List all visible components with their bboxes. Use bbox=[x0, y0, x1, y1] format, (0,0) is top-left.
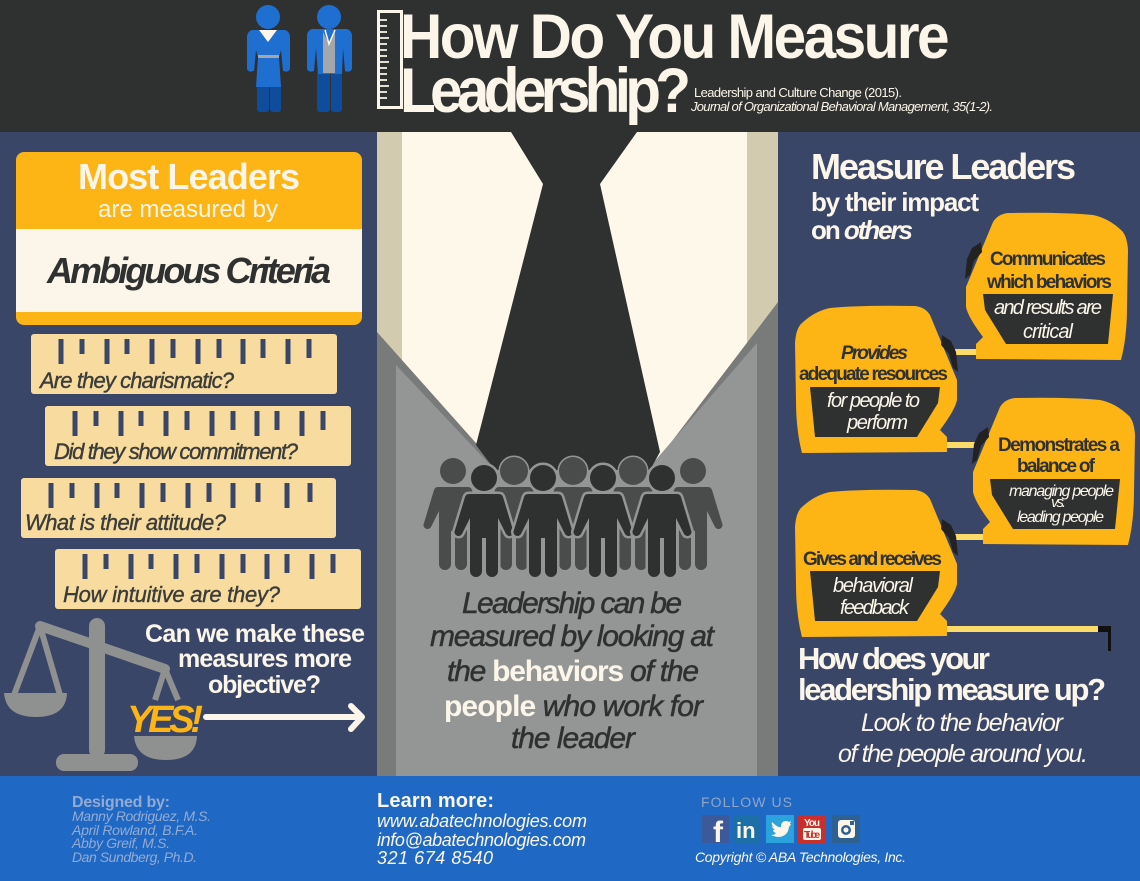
tape measure: demonstrates: vs. bbox=[1051, 494, 1066, 511]
footer bbox=[0, 776, 1140, 881]
icon: ruler outline bbox=[378, 12, 402, 108]
question: more objective: objective? bbox=[208, 671, 321, 699]
learn more: info@abatechnologies.com bbox=[377, 830, 586, 850]
arrow bbox=[206, 706, 362, 729]
icon: facebook: f bbox=[713, 816, 724, 849]
heading: Measure Leaders bbox=[811, 146, 1076, 187]
center statement: Leadership can be bbox=[462, 587, 682, 620]
icon: twitter bbox=[766, 815, 794, 843]
tape measure: provides: adequate resources bbox=[799, 364, 948, 385]
tie bbox=[476, 132, 660, 470]
follow us: FOLLOW US bbox=[701, 794, 792, 810]
credits: Dan Sundberg, Ph.D. bbox=[72, 849, 197, 865]
most leaders card: Most Leaders bbox=[78, 156, 300, 197]
title: Leadership? bbox=[400, 55, 691, 125]
heading bbox=[811, 146, 1076, 245]
tape measure: demonstrates: managing people bbox=[1009, 483, 1114, 500]
tape measure: demonstrates bbox=[972, 398, 1135, 545]
tape measure: gives and receives: feedback bbox=[840, 597, 910, 619]
tape measure: communicates: which behaviors bbox=[986, 272, 1112, 293]
citation bbox=[690, 85, 993, 114]
tape measure: provides: perform bbox=[846, 412, 908, 434]
icon: youtube: You bbox=[804, 818, 820, 829]
closing question: of the people around you. bbox=[838, 740, 1088, 768]
tape measure: communicates: and results are bbox=[994, 297, 1102, 319]
citation: Leadership and Culture Change (2015). bbox=[694, 85, 902, 100]
learn more: Learn more: bbox=[377, 790, 494, 812]
learn more: www.abatechnologies.com bbox=[377, 811, 587, 831]
title: How Do You Measure bbox=[400, 1, 950, 71]
front row bbox=[454, 465, 692, 577]
icon: linkedin bbox=[733, 815, 760, 843]
icon: linkedin: in bbox=[736, 818, 756, 843]
tape connectors bbox=[947, 349, 1111, 651]
icon: balance scale bbox=[4, 618, 197, 771]
title bbox=[400, 1, 950, 125]
tape measure: gives and receives: Gives and receives bbox=[803, 549, 942, 570]
ruler: did they show commitment bbox=[45, 406, 351, 466]
learn more bbox=[377, 790, 587, 868]
credits bbox=[71, 794, 211, 865]
credits: Abby Greif, M.S. bbox=[71, 835, 170, 851]
ruler: what is their attitude bbox=[21, 478, 336, 538]
center statement bbox=[430, 587, 716, 755]
background: navy side panels bbox=[0, 132, 1140, 776]
icon: man figure in suit bbox=[307, 5, 352, 112]
panel: center, suit and tie bbox=[377, 132, 778, 776]
center statement: measured by looking at bbox=[430, 620, 716, 653]
center statement: the leader bbox=[511, 722, 636, 755]
header band bbox=[0, 0, 1140, 132]
question: more objective: measures more bbox=[178, 645, 352, 673]
heading: by their impact bbox=[811, 187, 979, 217]
copyright: Copyright © ABA Technologies, Inc. bbox=[695, 849, 906, 865]
tape measure: demonstrates: leading people bbox=[1017, 509, 1104, 526]
most leaders card: are measured by bbox=[98, 196, 278, 223]
question: more objective: Can we make these bbox=[145, 620, 365, 648]
tape measure: provides: for people to bbox=[827, 390, 920, 412]
tape measure: communicates bbox=[965, 213, 1128, 360]
icon: crowd of people bbox=[423, 457, 723, 577]
tape measure: gives and receives: behavioral bbox=[833, 575, 914, 597]
closing question: Look to the behavior bbox=[861, 709, 1065, 737]
credits: April Rowland, B.F.A. bbox=[71, 822, 198, 838]
tape measure: demonstrates: Demonstrates a bbox=[998, 435, 1120, 456]
closing question: How does your bbox=[798, 641, 990, 676]
ruler: did they show commitment: Did they show commitment? bbox=[54, 439, 299, 464]
icon: youtube: Tube bbox=[804, 830, 820, 841]
yes label: YES! bbox=[127, 699, 203, 741]
tape measure: provides bbox=[795, 306, 958, 453]
center statement: people who work for bbox=[444, 690, 704, 723]
credits: Manny Rodriguez, M.S. bbox=[72, 808, 211, 824]
icon: instagram bbox=[832, 815, 860, 843]
icon: youtube bbox=[798, 815, 826, 843]
learn more: 321 674 8540 bbox=[377, 848, 493, 868]
ruler: what is their attitude: What is their attitude? bbox=[25, 510, 227, 535]
icon: woman figure bbox=[247, 5, 290, 112]
heading: on others bbox=[811, 215, 913, 245]
credits: Designed by: bbox=[72, 794, 170, 811]
ruler: how intuitive are they bbox=[55, 549, 361, 609]
back row bbox=[423, 457, 723, 570]
panel: right, measure leaders bbox=[795, 146, 1135, 768]
ruler: how intuitive are they: How intuitive are they? bbox=[63, 582, 281, 607]
panel: left, most leaders bbox=[4, 152, 365, 771]
ruler: are they charismatic: Are they charismatic? bbox=[38, 368, 235, 393]
question: more objective bbox=[145, 620, 365, 699]
tape measure: demonstrates: balance of bbox=[1017, 456, 1096, 477]
most leaders card: Ambiguous Criteria bbox=[46, 250, 331, 291]
tape measure: communicates: critical bbox=[1023, 321, 1074, 343]
tape measure: gives and receives bbox=[795, 490, 958, 637]
citation: Journal of Organizational Behavioral Management, 35(1-2). bbox=[690, 99, 993, 114]
closing question: leadership measure up? bbox=[798, 672, 1106, 707]
tape measure: communicates: Communicates bbox=[990, 249, 1106, 270]
tape measure: provides: Provides bbox=[841, 343, 908, 364]
ruler: are they charismatic bbox=[31, 334, 337, 394]
most leaders card bbox=[16, 152, 362, 325]
closing question bbox=[798, 641, 1106, 768]
center statement: the behaviors of the bbox=[447, 655, 699, 688]
icon: facebook bbox=[702, 815, 729, 849]
